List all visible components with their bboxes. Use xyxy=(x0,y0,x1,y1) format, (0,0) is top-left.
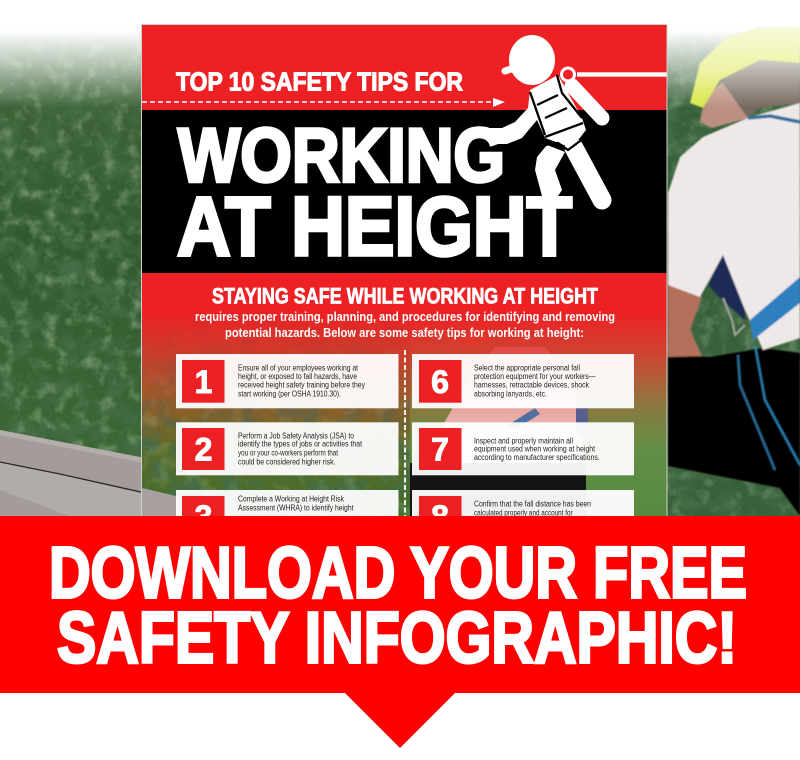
worker helmet xyxy=(690,27,800,108)
tip 6 xyxy=(412,354,634,408)
worker shirt xyxy=(668,103,800,350)
tip 1: received height safety training before they xyxy=(238,381,365,390)
tip 6: 6 xyxy=(431,364,449,400)
banner arrow xyxy=(345,693,455,748)
tip 2: you or your co-workers perform that xyxy=(238,449,339,458)
dashed arrow xyxy=(142,98,505,107)
tip 2: 2 xyxy=(195,432,212,468)
intro text: requires proper training, planning, and procedures for identifying and removing xyxy=(195,309,615,324)
intro text: potential hazards. Below are some safety tips for working at height: xyxy=(225,325,584,340)
dark gap under sleeve xyxy=(708,253,745,320)
intro heading: STAYING SAFE WHILE WORKING AT HEIGHT xyxy=(212,284,598,309)
tip 8: 8 xyxy=(431,499,449,535)
tip 7: according to manufacturer specifications. xyxy=(474,453,600,462)
header line: TOP 10 SAFETY TIPS FOR xyxy=(176,66,463,96)
icon: harnessed worker figure xyxy=(490,35,666,200)
title: working: WORKING xyxy=(178,114,505,198)
background photo: trees and roof at left xyxy=(0,20,145,516)
divider xyxy=(404,350,406,516)
tip 3 xyxy=(176,490,398,535)
worker face xyxy=(700,82,748,128)
tip 8 xyxy=(412,490,634,535)
tip 8: calculated properly and account for xyxy=(474,509,573,518)
tip 1: 1 xyxy=(195,364,212,400)
tip 7 xyxy=(412,422,634,475)
background photo: worker at right xyxy=(665,20,800,516)
tip 3: Complete a Working at Height Risk xyxy=(238,495,344,504)
worker trousers xyxy=(668,348,800,516)
tip 6: Select the appropriate personal fall xyxy=(474,364,580,373)
tip 1: height, or exposed to fall hazards, have xyxy=(238,372,357,381)
title: at height: AT HEIGHT xyxy=(177,179,572,273)
tip 7: equipment used when working at height xyxy=(474,445,596,454)
poster xyxy=(141,24,668,535)
intro text xyxy=(195,309,615,340)
tip 7: Inspect and properly maintain all xyxy=(474,436,573,445)
worker forearm xyxy=(668,285,702,357)
worker hair xyxy=(720,60,800,118)
tip 3: 3 xyxy=(195,499,212,535)
tip 3: Assessment (WHRA) to identify height xyxy=(238,504,354,513)
tip 2: could be considered higher risk. xyxy=(238,458,336,467)
poster red header xyxy=(142,25,666,111)
white fade at top of photo xyxy=(0,0,800,108)
tip 6: harnesses, retractable devices, shock xyxy=(474,381,589,390)
call-to-action banner xyxy=(0,516,800,748)
tip 7: 7 xyxy=(431,432,449,468)
harness straps xyxy=(750,277,800,340)
tip 6: absorbing lanyards, etc. xyxy=(474,390,547,399)
person in poster photo xyxy=(410,463,586,516)
tip 1: Ensure all of your employees working at xyxy=(238,364,359,373)
tip 2 xyxy=(176,422,398,475)
tip 1 xyxy=(176,354,398,408)
tip 8: Confirm that the fall distance has been xyxy=(474,500,591,509)
tip 2: identify the types of jobs or activities that xyxy=(238,440,363,449)
tip 2: Perform a Job Safety Analysis (JSA) to xyxy=(238,431,355,440)
poster black band xyxy=(142,110,666,273)
tip 1: start working (per OSHA 1910.30). xyxy=(238,390,341,399)
tip 6: protection equipment for your workers— xyxy=(474,372,596,381)
poster photo section xyxy=(142,273,667,516)
